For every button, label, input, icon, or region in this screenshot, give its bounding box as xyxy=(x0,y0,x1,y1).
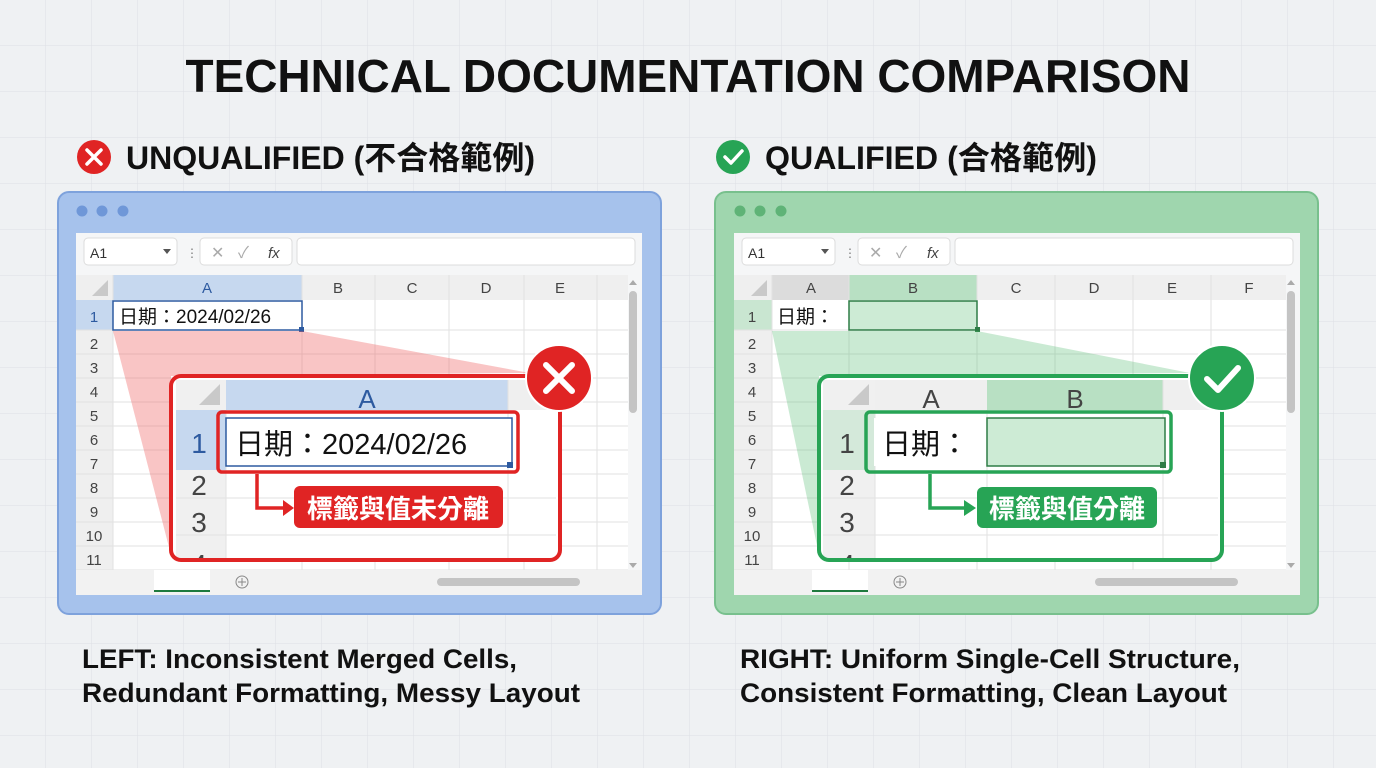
heading: unqualified: UNQUALIFIED (不合格範例) xyxy=(126,140,535,176)
callout: unqualified zoom: 1 xyxy=(191,428,207,459)
panel: qualified spreadsheet: B xyxy=(908,280,918,297)
panel: qualified spreadsheet: 8 xyxy=(748,480,756,497)
panel: unqualified spreadsheet: ✓ xyxy=(238,245,249,262)
panel: qualified spreadsheet: 9 xyxy=(748,504,756,521)
panel: qualified spreadsheet: 日期： xyxy=(777,306,834,328)
panel: unqualified spreadsheet: 9 xyxy=(90,504,98,521)
panel: unqualified spreadsheet: 8 xyxy=(90,480,98,497)
callout: qualified zoom: 1 xyxy=(839,428,855,459)
text: left caption: Redundant Formatting, Messy Layout xyxy=(82,678,580,708)
panel: unqualified spreadsheet: 1 xyxy=(90,309,98,326)
panel: qualified spreadsheet: 6 xyxy=(748,432,756,449)
panel: qualified spreadsheet: fx xyxy=(927,245,939,262)
panel: unqualified spreadsheet: ⋮ xyxy=(186,246,198,260)
panel: qualified spreadsheet: 11 xyxy=(744,552,760,569)
text: right caption xyxy=(740,644,1240,708)
callout: unqualified zoom: 日期：2024/02/26 xyxy=(235,429,467,461)
icon: x badge xyxy=(526,345,592,411)
text: right caption: Consistent Formatting, Clean Layout xyxy=(740,678,1227,708)
panel: qualified spreadsheet: E xyxy=(1167,280,1177,297)
callout: qualified zoom: A xyxy=(922,384,940,414)
heading: qualified: QUALIFIED (合格範例) xyxy=(765,140,1097,176)
callout: qualified zoom: 2 xyxy=(839,470,855,501)
panel: unqualified spreadsheet: 7 xyxy=(90,456,98,473)
panel: unqualified spreadsheet: 5 xyxy=(90,408,98,425)
panel: unqualified spreadsheet xyxy=(58,192,661,614)
callout: qualified zoom: B xyxy=(1066,384,1084,414)
panel: unqualified spreadsheet: C xyxy=(407,280,418,297)
title: TECHNICAL DOCUMENTATION COMPARISON xyxy=(186,50,1190,102)
panel: qualified spreadsheet: ✓ xyxy=(896,245,907,262)
panel: qualified spreadsheet: 4 xyxy=(748,384,756,401)
panel: qualified spreadsheet: A1 xyxy=(748,245,765,261)
arrow xyxy=(930,474,966,508)
panel: unqualified spreadsheet: A1 xyxy=(90,245,107,261)
panel: qualified spreadsheet: C xyxy=(1011,280,1022,297)
panel: unqualified spreadsheet: D xyxy=(481,280,492,297)
panel: qualified spreadsheet: F xyxy=(1244,280,1254,297)
callout: qualified zoom: 3 xyxy=(839,507,855,538)
panel: unqualified spreadsheet: 3 xyxy=(90,360,98,377)
panel: qualified spreadsheet: 1 xyxy=(748,309,756,326)
panel: qualified spreadsheet: 7 xyxy=(748,456,756,473)
panel: unqualified spreadsheet: B xyxy=(333,280,343,297)
text: right caption: RIGHT: Uniform Single-Cell Structure, xyxy=(740,644,1240,674)
panel: qualified spreadsheet xyxy=(715,192,1318,614)
callout: unqualified zoom xyxy=(171,345,592,580)
callout: qualified zoom: 日期： xyxy=(882,429,969,461)
callout: qualified zoom xyxy=(819,345,1255,580)
callout: unqualified zoom: 標籤與值未分離 xyxy=(307,494,489,524)
panel: unqualified spreadsheet: E xyxy=(555,280,565,297)
panel: unqualified spreadsheet: 2 xyxy=(90,336,98,353)
panel: unqualified spreadsheet: A xyxy=(202,280,212,297)
panel: qualified spreadsheet: A xyxy=(806,280,816,297)
text: left caption xyxy=(82,644,580,708)
panel: qualified spreadsheet: ⋮ xyxy=(844,246,856,260)
panel: unqualified spreadsheet: 11 xyxy=(86,552,102,569)
panel: unqualified spreadsheet: 6 xyxy=(90,432,98,449)
arrow xyxy=(257,474,285,508)
panel: qualified spreadsheet: 2 xyxy=(748,336,756,353)
panel: unqualified spreadsheet: fx xyxy=(268,245,280,262)
callout: unqualified zoom: 4 xyxy=(191,549,207,580)
panel: unqualified spreadsheet: 日期：2024/02/26 xyxy=(119,306,271,328)
callout: unqualified zoom: A xyxy=(358,384,376,414)
panel: unqualified spreadsheet: 4 xyxy=(90,384,98,401)
icon: check badge xyxy=(1189,345,1255,411)
text: left caption: LEFT: Inconsistent Merged Cells, xyxy=(82,644,517,674)
panel: qualified spreadsheet: 10 xyxy=(744,528,760,545)
callout: qualified zoom: 4 xyxy=(839,549,855,580)
panel: qualified spreadsheet: 5 xyxy=(748,408,756,425)
panel: unqualified spreadsheet: ✕ xyxy=(211,245,224,262)
label xyxy=(294,486,503,528)
label xyxy=(977,487,1157,528)
panel: qualified spreadsheet: D xyxy=(1089,280,1100,297)
panel: qualified spreadsheet: ✕ xyxy=(869,245,882,262)
callout: unqualified zoom: 2 xyxy=(191,470,207,501)
callout: qualified zoom: 標籤與值分離 xyxy=(989,494,1145,524)
panel: qualified spreadsheet: 3 xyxy=(748,360,756,377)
callout: unqualified zoom: 3 xyxy=(191,507,207,538)
panel: unqualified spreadsheet: 10 xyxy=(86,528,102,545)
